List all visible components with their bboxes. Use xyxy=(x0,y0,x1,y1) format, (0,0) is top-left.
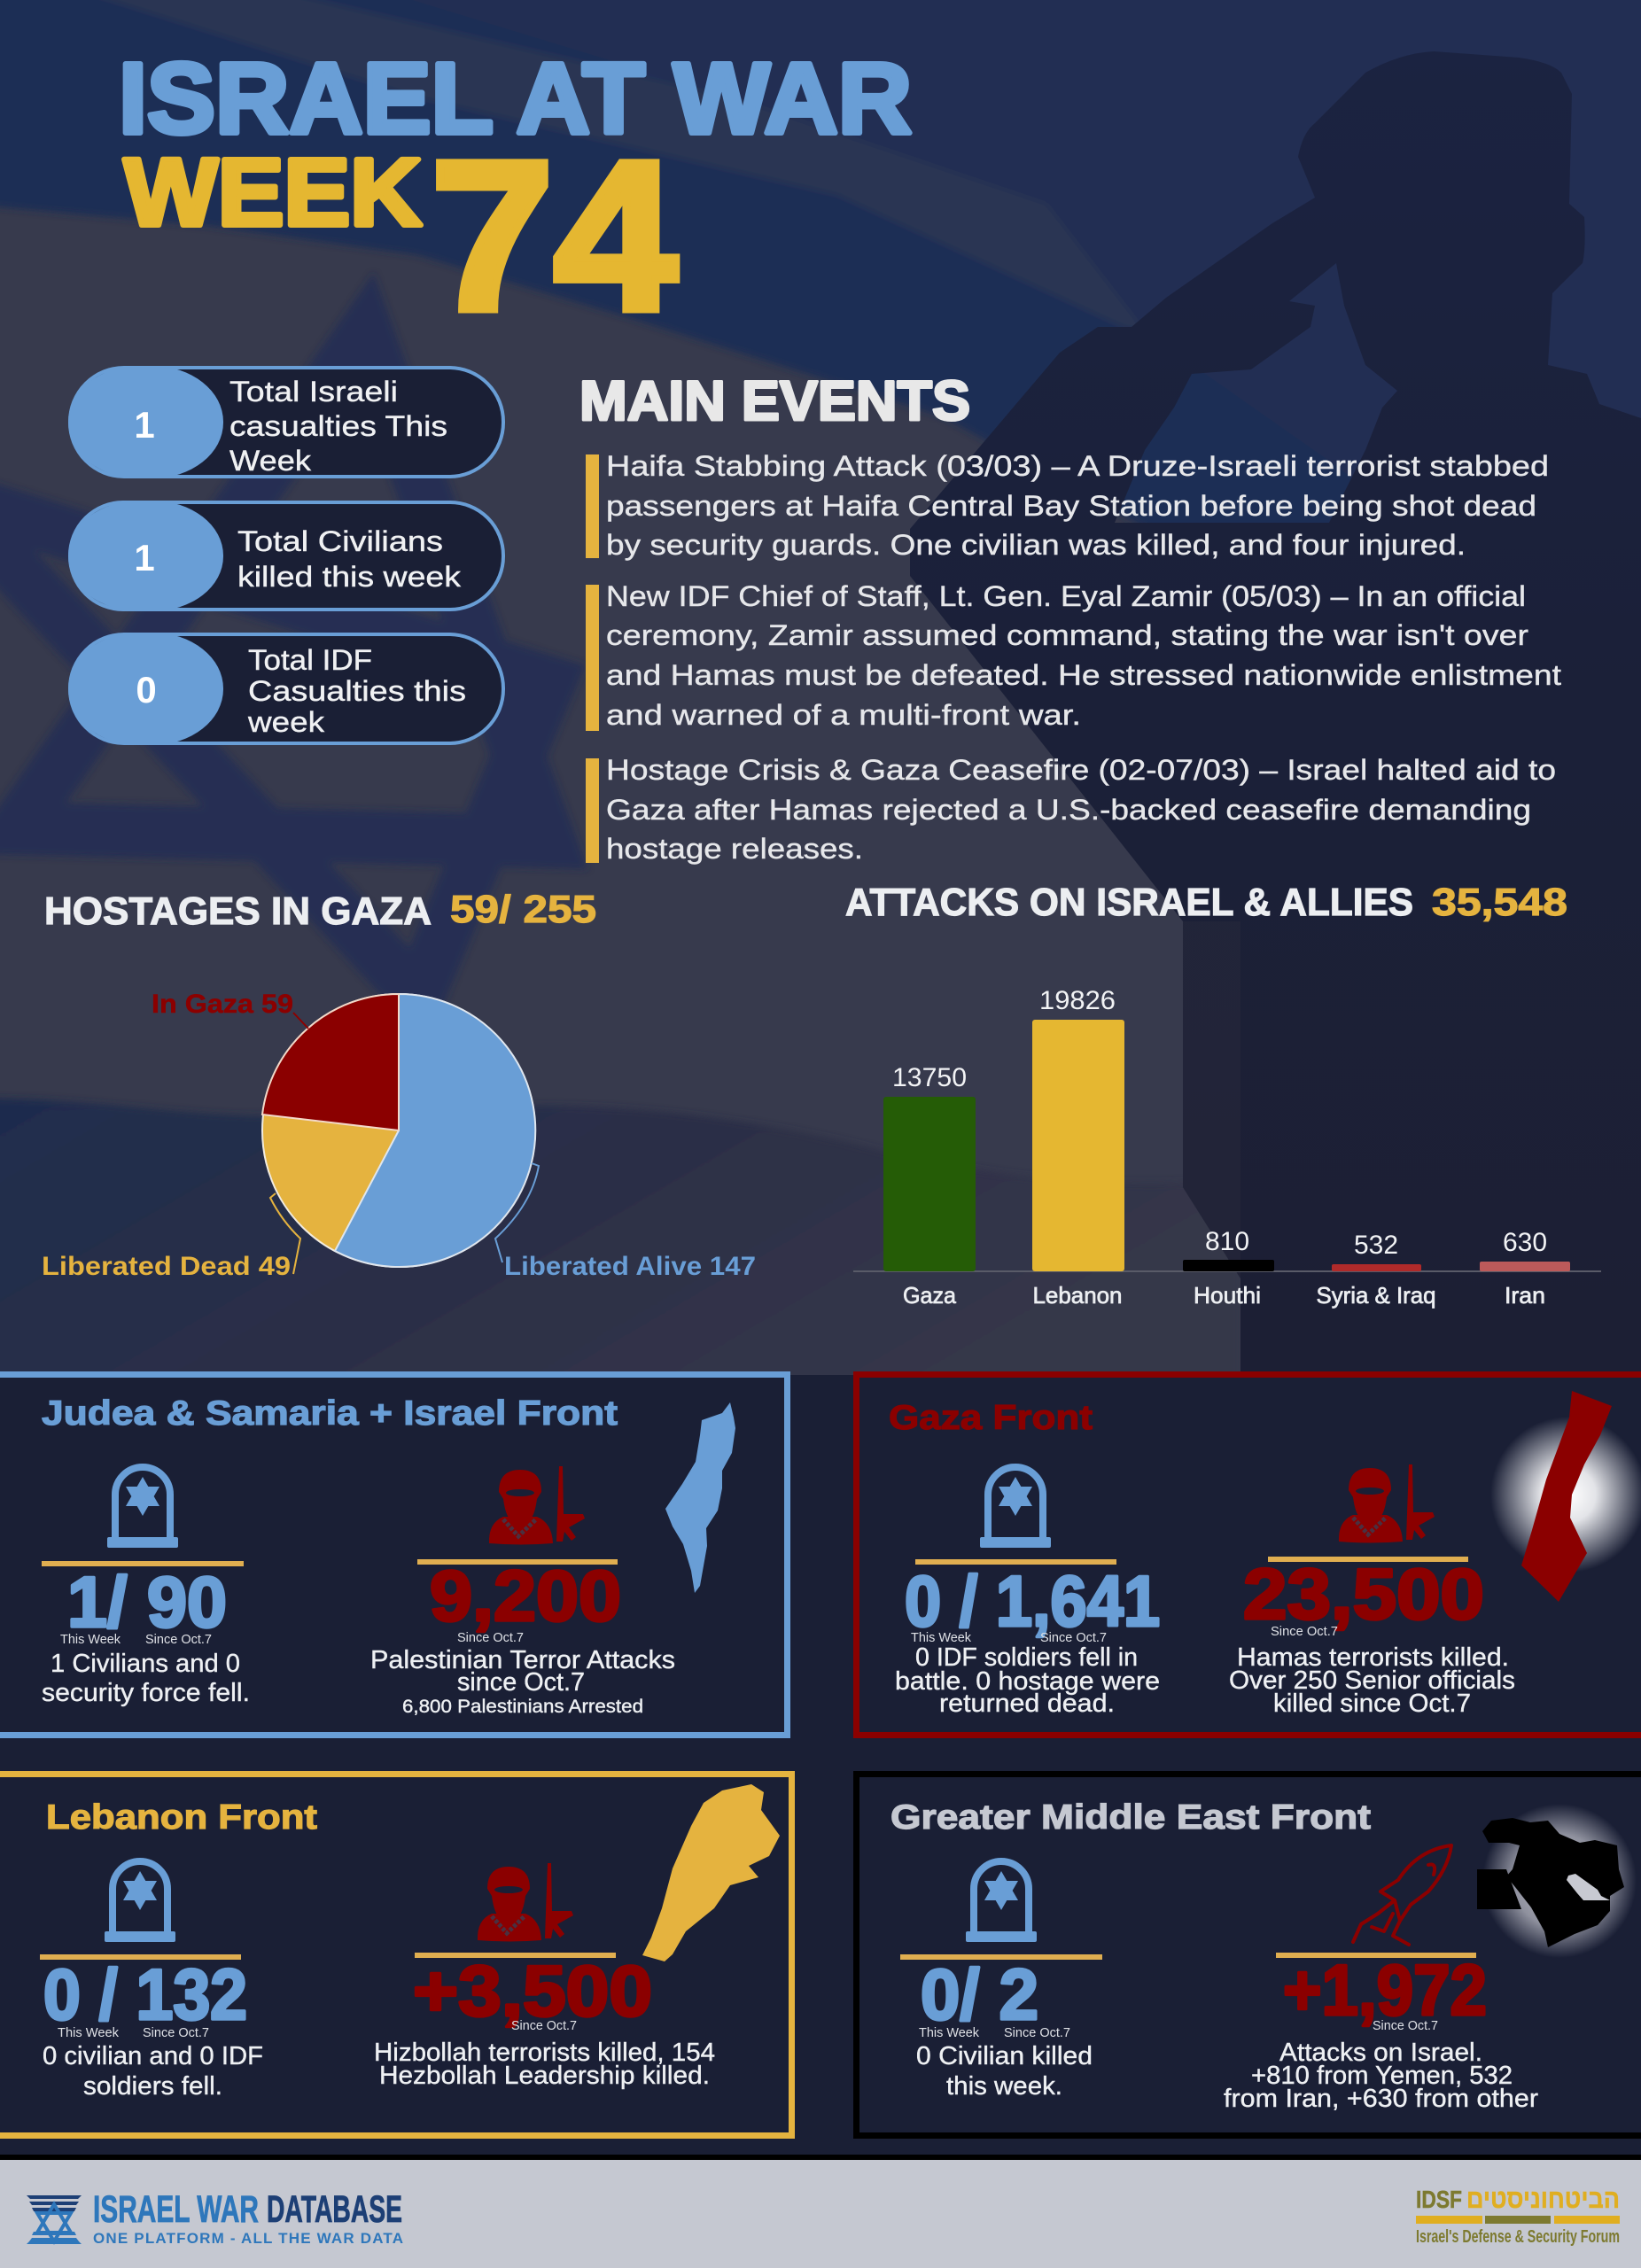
figure: fallen: 0 / 1,641 xyxy=(905,1562,1160,1642)
icon: masked fighter xyxy=(1339,1464,1435,1543)
event: hostage crisis: Gaza after Hamas rejected a U.S.-backed ceasefire demanding xyxy=(606,794,1531,826)
description: terrorists killed: Over 250 Senior officials xyxy=(1229,1666,1515,1695)
stat pill: total civilians killed: 1 xyxy=(134,537,155,579)
pie chart: hostages xyxy=(262,994,539,1274)
pie label: in Gaza: In Gaza 59 xyxy=(152,990,293,1019)
caption: this week: This Week xyxy=(911,1630,971,1645)
heading: hostages in Gaza xyxy=(44,888,596,933)
icon: gravestone xyxy=(105,1861,175,1942)
stat pill: total civilians killed: killed this week xyxy=(237,561,462,593)
divider xyxy=(1268,1557,1468,1562)
event: new chief of staff: ceremony, Zamir assumed command, stating the war isn't over xyxy=(606,619,1528,651)
figure: terror attacks: 9,200 xyxy=(430,1557,621,1636)
heading: Greater Middle East front: Greater Middle East Front xyxy=(890,1798,1371,1837)
description: attacks on Israel: Attacks on Israel. xyxy=(1279,2039,1482,2067)
logo: IDSF: IDSF xyxy=(1416,2186,1462,2213)
bar chart: attacks by front: 532 xyxy=(1354,1231,1398,1260)
background: flag and saluting soldier xyxy=(0,0,1641,1391)
event: Haifa stabbing xyxy=(586,450,1549,561)
caption: since Oct 7: Since Oct.7 xyxy=(457,1630,524,1645)
description: terrorists killed xyxy=(374,2039,715,2090)
caption: since Oct 7: Since Oct.7 xyxy=(1004,2025,1070,2040)
description: fallen: 0 IDF soldiers fell in xyxy=(915,1643,1138,1672)
figure: attacks on Israel: +1,972 xyxy=(1283,1951,1487,2031)
pie label: liberated alive: Liberated Alive 147 xyxy=(504,1252,756,1281)
stat pill: total IDF casualties: week xyxy=(247,706,325,738)
logo: Israel War Database xyxy=(27,2188,403,2247)
stat pill: total IDF casualties: Total IDF xyxy=(248,644,372,676)
bar chart: attacks by front: Houthi xyxy=(1194,1282,1261,1309)
description: fallen xyxy=(42,1650,250,1707)
description: attacks on Israel: +810 from Yemen, 532 xyxy=(1251,2062,1513,2090)
event: new chief of staff: and Hamas must be defeated. He stressed nationwide enlistment xyxy=(606,659,1561,691)
logo: IDSF: הביטחוניסטים xyxy=(1466,2185,1620,2214)
event: Haifa stabbing: passengers at Haifa Central Bay Station before being shot dead xyxy=(606,490,1536,522)
divider xyxy=(915,1559,1116,1565)
icon: star logo xyxy=(27,2195,82,2244)
title: Week: WEEK xyxy=(124,138,422,245)
stat pill: total Israeli casualties xyxy=(68,366,503,478)
caption: since Oct 7: Since Oct.7 xyxy=(1040,1630,1107,1645)
heading: main events: MAIN EVENTS xyxy=(579,370,970,432)
bar chart: attacks by front: Lebanon xyxy=(1033,1282,1122,1309)
heading: attacks on Israel and allies: ATTACKS ON ISRAEL & ALLIES xyxy=(845,881,1413,924)
title: Israel at War: ISRAEL AT WAR xyxy=(119,43,912,154)
heading: hostages in Gaza: 59/ 255 xyxy=(450,888,596,931)
caption: since Oct 7: Since Oct.7 xyxy=(143,2025,209,2040)
bar chart: attacks by front: 13750 xyxy=(892,1063,967,1092)
stat pill: total Israeli casualties: Total Israeli xyxy=(229,376,398,408)
bar chart: attacks by front: 19826 xyxy=(1039,986,1116,1015)
description: fallen: security force fell. xyxy=(42,1679,250,1707)
description: terrorists killed: Hamas terrorists killed. xyxy=(1237,1643,1509,1672)
stat pill: total IDF casualties: Casualties this xyxy=(248,675,466,707)
description: civilians killed xyxy=(916,2042,1093,2101)
panel: Greater Middle East front xyxy=(856,1774,1641,2135)
stat pill: total civilians killed xyxy=(68,501,503,611)
divider xyxy=(1276,1953,1476,1958)
icon: map of Gaza with glow xyxy=(1490,1391,1641,1602)
logo: IDSF xyxy=(1416,2185,1620,2247)
caption: since Oct 7: Since Oct.7 xyxy=(1373,2018,1438,2033)
icon: masked fighter xyxy=(489,1466,585,1545)
stat pill: total IDF casualties xyxy=(68,633,503,745)
description: fallen xyxy=(895,1643,1160,1718)
icon: map of the Middle East xyxy=(1477,1804,1637,1958)
heading: Judea and Samaria front: Judea & Samaria + Israel Front xyxy=(42,1394,618,1433)
divider xyxy=(415,1953,616,1958)
divider xyxy=(417,1559,618,1565)
description: terror attacks: Palestinian Terror Attacks xyxy=(370,1646,675,1674)
icon: gravestone xyxy=(966,1861,1037,1942)
divider xyxy=(900,1954,1102,1960)
caption: this week: This Week xyxy=(58,2025,119,2040)
caption: since Oct 7: Since Oct.7 xyxy=(1271,1624,1338,1639)
figure: civilians killed: 0/ 2 xyxy=(921,1955,1038,2035)
bar chart: attacks by front: 810 xyxy=(1205,1227,1249,1256)
caption: this week: This Week xyxy=(60,1632,121,1647)
heading: Gaza front: Gaza Front xyxy=(889,1399,1093,1437)
description: terrorists killed: Hezbollah Leadership killed. xyxy=(379,2062,710,2090)
bar chart: attacks by front: Gaza xyxy=(903,1282,957,1309)
figure: fallen: 1/ 90 xyxy=(67,1563,227,1643)
event: Haifa stabbing: Haifa Stabbing Attack (03/03) – A Druze-Israeli terrorist stabbed xyxy=(606,450,1549,482)
description: terrorists killed: killed since Oct.7 xyxy=(1273,1689,1471,1718)
caption: since Oct 7: Since Oct.7 xyxy=(511,2018,577,2033)
event: hostage crisis xyxy=(586,754,1556,865)
logo: Israel War Database: DATABASE xyxy=(267,2188,402,2231)
icon: gravestone xyxy=(107,1467,178,1548)
description: fallen: 1 Civilians and 0 xyxy=(51,1650,240,1678)
description: fallen: returned dead. xyxy=(939,1689,1115,1718)
description: terrorists killed xyxy=(1229,1643,1515,1718)
stat pill: total Israeli casualties: 1 xyxy=(134,404,155,446)
description: terror attacks: since Oct.7 xyxy=(457,1668,585,1697)
figure: fallen: 0 / 132 xyxy=(43,1955,247,2035)
description: terror attacks xyxy=(370,1646,675,1717)
description: attacks on Israel xyxy=(1224,2039,1538,2113)
stat pill: total Israeli casualties: casualties This xyxy=(229,410,447,442)
event: hostage crisis: hostage releases. xyxy=(606,833,863,865)
description: terrorists killed: Hizbollah terrorists killed, 154 xyxy=(374,2039,715,2067)
panel: Lebanon front xyxy=(0,1774,792,2135)
caption: this week: This Week xyxy=(919,2025,979,2040)
event: new chief of staff xyxy=(586,580,1561,731)
description: fallen: 0 civilian and 0 IDF xyxy=(43,2042,263,2070)
divider xyxy=(42,1561,244,1566)
event: hostage crisis: Hostage Crisis & Gaza Ceasefire (02-07/03) – Israel halted aid to xyxy=(606,754,1556,786)
bar chart: attacks by front xyxy=(853,986,1601,1309)
description: civilians killed: this week. xyxy=(946,2072,1062,2101)
divider xyxy=(40,1954,241,1960)
description: fallen: battle. 0 hostage were xyxy=(895,1667,1160,1696)
heading: hostages in Gaza: HOSTAGES IN GAZA xyxy=(44,889,432,933)
figure: terrorists killed: 23,500 xyxy=(1243,1555,1484,1635)
panel: Gaza front xyxy=(856,1375,1641,1735)
icon: map of Israel xyxy=(665,1402,735,1593)
stat pill: total IDF casualties: 0 xyxy=(136,669,157,711)
title: week number 74: 74 xyxy=(431,117,677,354)
description: attacks on Israel: from Iran, +630 from other xyxy=(1224,2085,1538,2113)
heading: attacks on Israel and allies: 35,548 xyxy=(1432,881,1567,924)
tagline: ONE PLATFORM - ALL THE WAR DATA xyxy=(93,2230,403,2247)
bar chart: attacks by front: Syria & Iraq xyxy=(1317,1282,1435,1309)
stat pill: total civilians killed: Total Civilians xyxy=(237,525,443,557)
footer band xyxy=(0,2155,1641,2268)
lower section background xyxy=(0,1375,1641,2155)
description: fallen xyxy=(43,2042,263,2101)
figure: terrorists killed: +3,500 xyxy=(413,1952,652,2031)
description: terror attacks: 6,800 Palestinians Arrested xyxy=(402,1697,643,1717)
description: fallen: soldiers fell. xyxy=(83,2072,222,2101)
description: civilians killed: 0 Civilian killed xyxy=(916,2042,1093,2070)
icon: rocket xyxy=(1353,1845,1451,1945)
wordmark: ISRAEL WAR xyxy=(93,2188,259,2231)
icon: gravestone xyxy=(980,1467,1051,1548)
event: new chief of staff: and warned of a multi-front war. xyxy=(606,699,1081,731)
heading: Lebanon front: Lebanon Front xyxy=(46,1798,317,1837)
event: Haifa stabbing: by security guards. One civilian was killed, and four injured. xyxy=(606,529,1466,561)
pie label: liberated dead: Liberated Dead 49 xyxy=(42,1252,291,1281)
stat pill: total Israeli casualties: Week xyxy=(229,445,312,477)
bar chart: attacks by front: 630 xyxy=(1503,1228,1547,1257)
panel: Judea and Samaria + Israel front xyxy=(0,1375,787,1735)
bar chart: attacks by front: Iran xyxy=(1505,1282,1545,1309)
soldier silhouette xyxy=(910,51,1641,1382)
event: new chief of staff: New IDF Chief of Staff, Lt. Gen. Eyal Zamir (05/03) – In an official xyxy=(606,580,1526,612)
icon: map of Lebanon xyxy=(642,1784,780,1961)
caption: since Oct 7: Since Oct.7 xyxy=(145,1632,212,1647)
icon: masked fighter xyxy=(478,1863,573,1942)
